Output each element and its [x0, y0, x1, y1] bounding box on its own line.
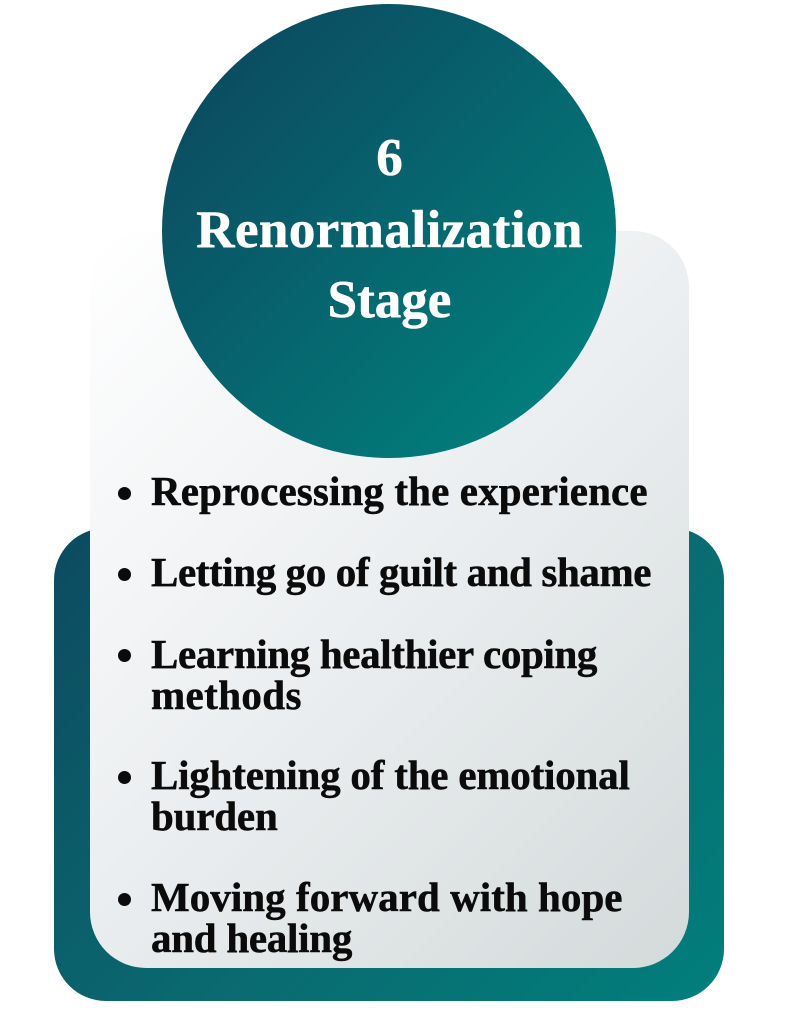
- bullet 4: [118, 752, 630, 839]
- heading: stage number: 6: [376, 129, 403, 187]
- bullet 3: Learning healthier coping: [151, 631, 597, 677]
- bullet 5: [118, 874, 623, 962]
- bullet 4: burden: [151, 793, 278, 839]
- heading: stage title: Stage: [328, 271, 451, 329]
- circle header: [162, 4, 616, 458]
- bullet 5: and healing: [151, 915, 352, 961]
- bullet list: [118, 468, 651, 962]
- bullet 1: Reprocessing the experience: [151, 468, 648, 514]
- bullet 4: Lightening of the emotional: [151, 752, 630, 798]
- heading: stage title: [196, 201, 583, 329]
- bullet 3: [118, 631, 598, 718]
- bullet 2: Letting go of guilt and shame: [151, 549, 651, 595]
- bullet 3: methods: [151, 672, 302, 718]
- panel: teal back card: [54, 528, 724, 1001]
- heading: stage title: Renormalization: [196, 201, 583, 259]
- panel: light content card: [90, 231, 689, 968]
- bullet 5: Moving forward with hope: [151, 874, 623, 920]
